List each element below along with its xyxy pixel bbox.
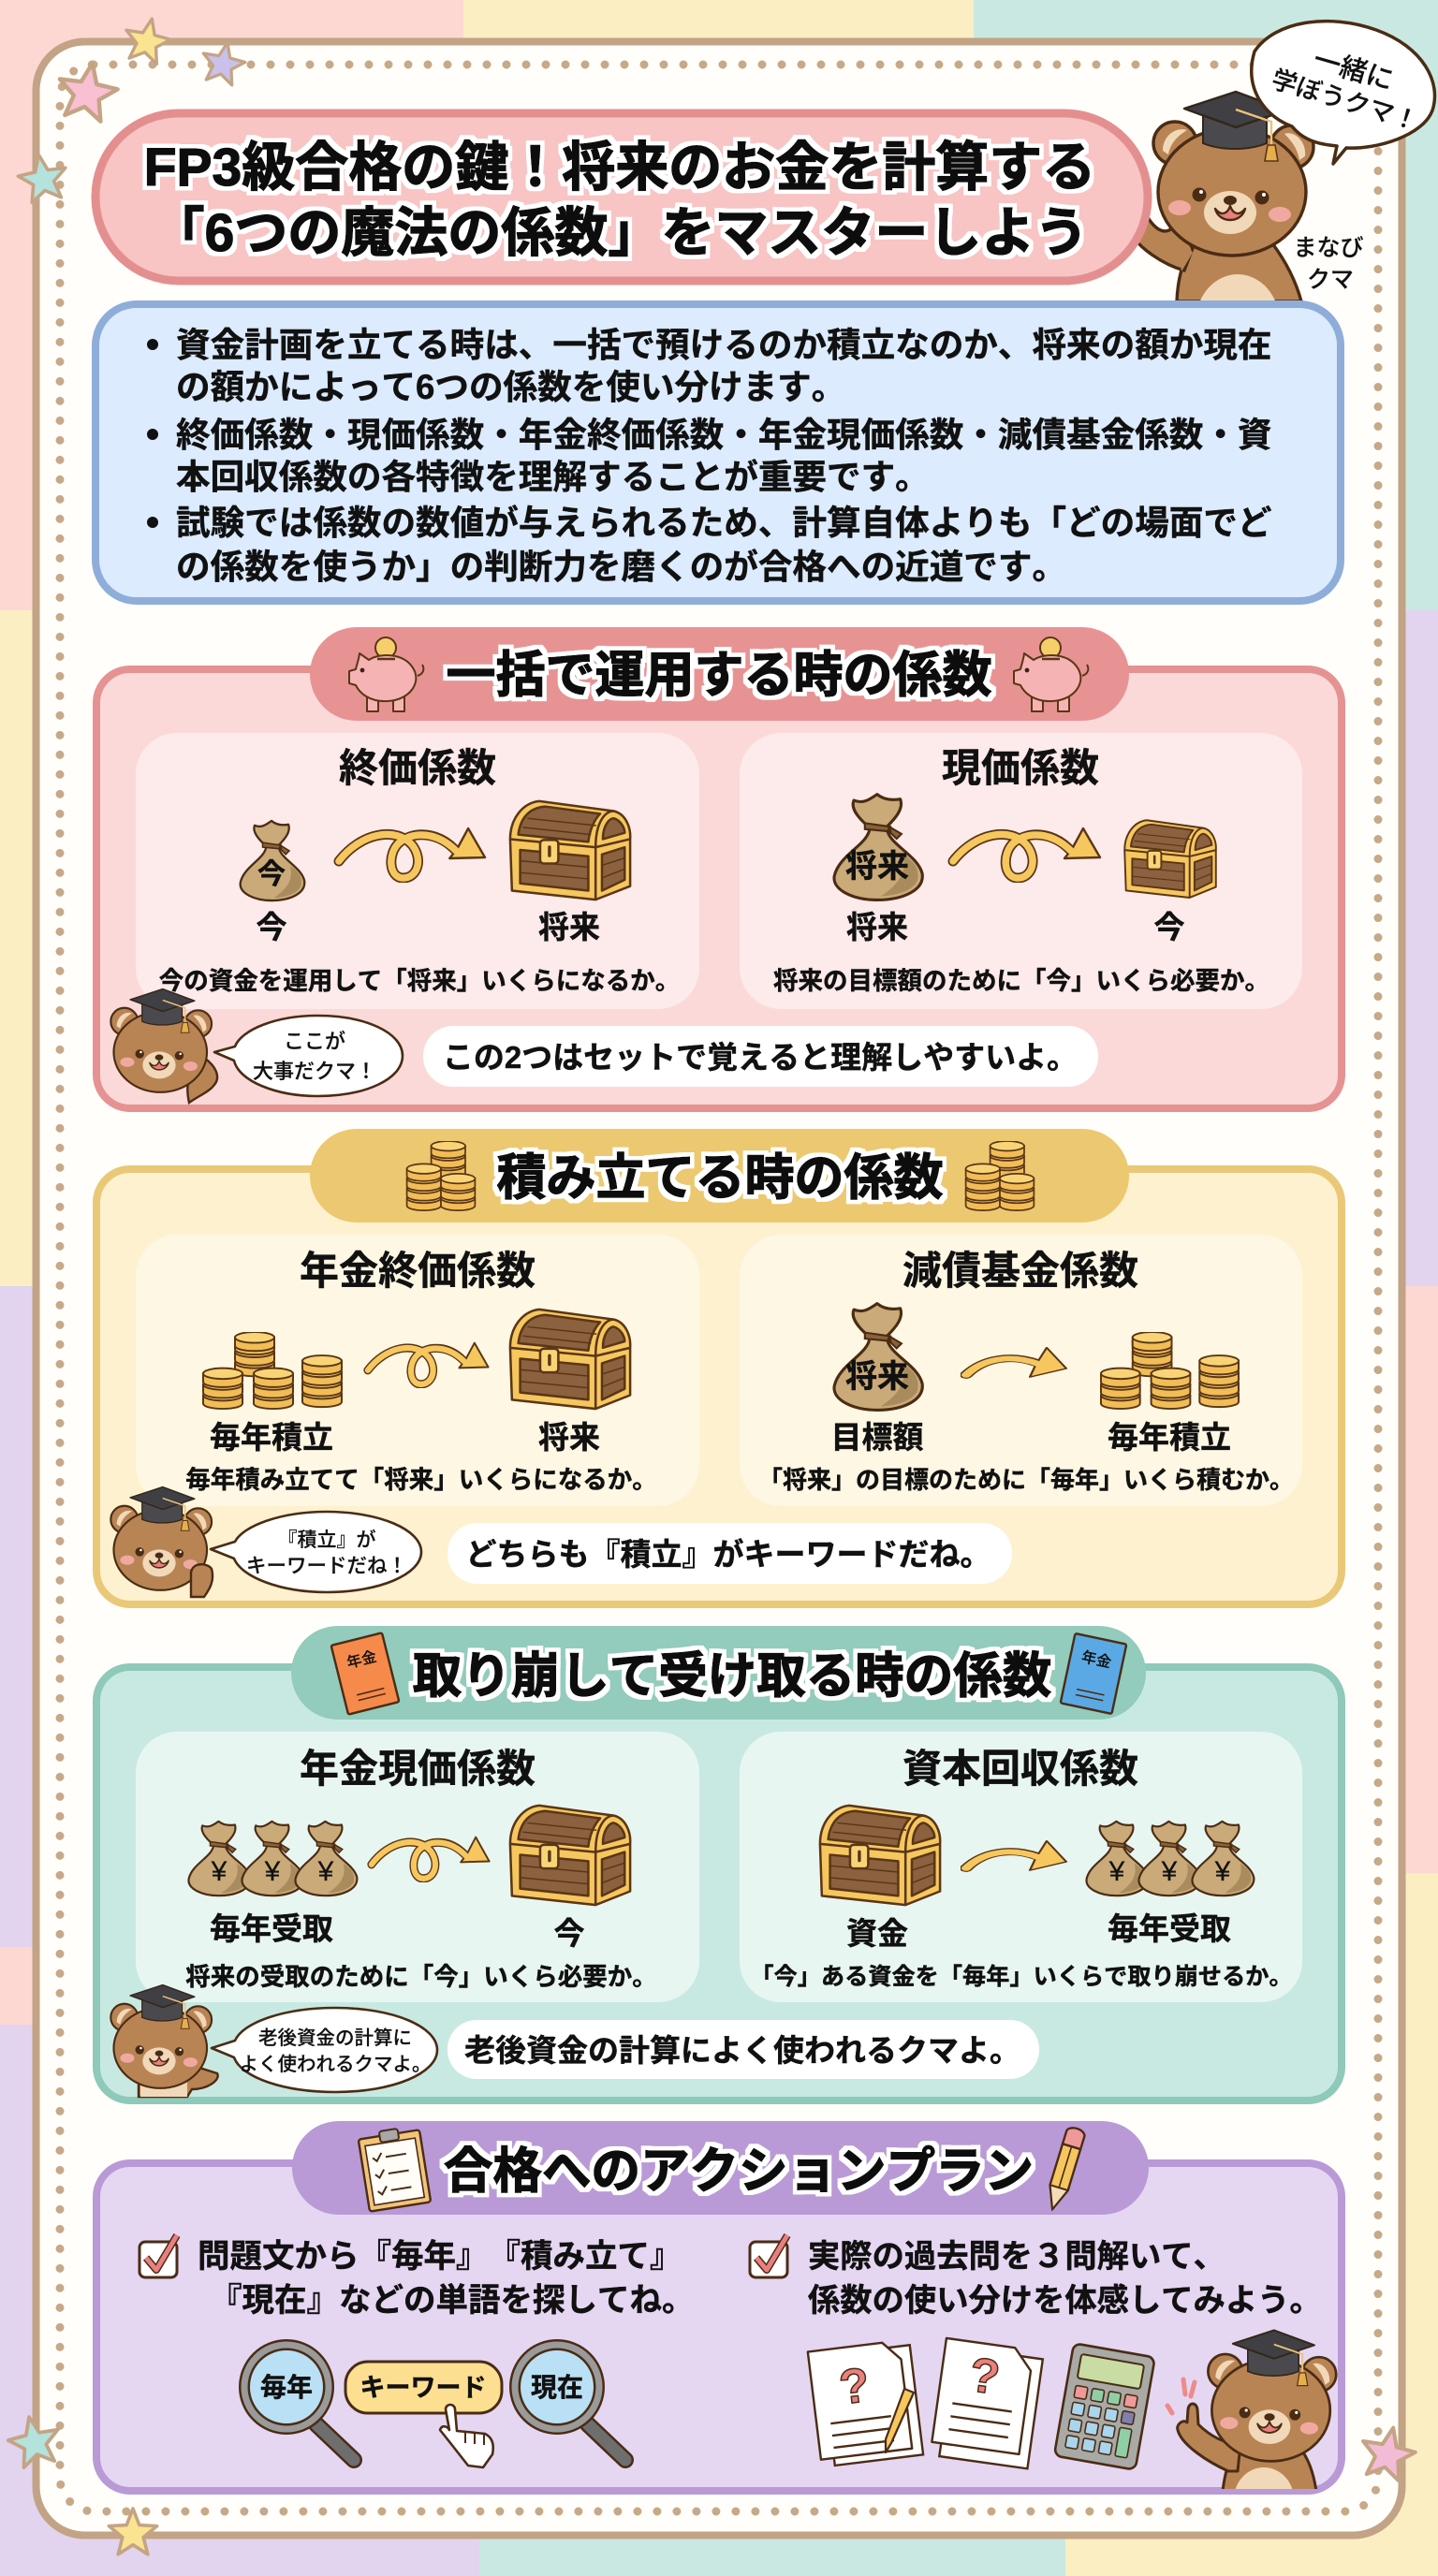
checklist item 2: 実際の過去問を３問解いて、	[808, 2239, 1225, 2275]
icon: money bag	[834, 1304, 922, 1410]
card: 年金現価係数: 毎年受取	[210, 1911, 333, 1946]
panel: summary bullets: 試験では係数の数値が与えられるため、計算自体よりも「どの場面でど	[176, 504, 1272, 542]
button: キーワード	[345, 2362, 502, 2413]
speech bubble	[214, 1016, 403, 1096]
speech bubble: 一緒に学ぼうクマ	[1252, 22, 1434, 164]
panel: 合格へのアクションプラン	[96, 2121, 1342, 2531]
note	[448, 1523, 1012, 1584]
icon: blue pension book	[1061, 1633, 1126, 1714]
heading	[310, 627, 1129, 721]
card: 現価係数: 将来の目標額のために「今」いくら必要か。	[773, 967, 1269, 995]
speech bubble: 老後資金の計算に	[258, 2027, 412, 2049]
icon: blue pension book: 年金	[1080, 1648, 1113, 1671]
heading: 取り崩して受け取る時の係数	[413, 1648, 1051, 1704]
panel: summary bullets: の係数を使うか」の判断力を磨くのが合格への近道です。	[176, 548, 1066, 586]
heading: 合格へのアクションプラン	[444, 2144, 1034, 2199]
card: 終価係数: 今の資金を運用して「将来」いくらになるか。	[159, 967, 680, 995]
speech bubble: よく使われるクマよ。	[240, 2054, 431, 2075]
card: 減債基金係数: 「将来」の目標のために「毎年」いくら積むか。	[758, 1466, 1294, 1494]
card: 終価係数: 今	[257, 910, 286, 944]
icon: orange pension book: 年金	[345, 1648, 378, 1672]
card: 現価係数: 今	[1153, 910, 1185, 944]
card: 減債基金係数: 毎年積立	[1108, 1420, 1231, 1455]
checklist item 1: 『現在』などの単語を探してね。	[210, 2283, 695, 2319]
icon: clipboard	[358, 2125, 431, 2212]
speech bubble: キーワードだね！	[246, 1555, 407, 1577]
icon: chest	[510, 801, 630, 900]
card: 資本回収係数: 資金	[846, 1916, 908, 1951]
bear	[110, 1487, 213, 1597]
heading	[291, 1626, 1146, 1720]
panel: summary bullets: 資金計画を立てる時は、一括で預けるのか積立なのか、将来の額か現在	[176, 326, 1272, 364]
card: 資本回収係数: 資本回収係数	[902, 1747, 1138, 1791]
card: 年金終価係数: 毎年積立	[210, 1420, 333, 1455]
note: 老後資金の計算によく使われるクマよ。	[464, 2033, 1020, 2068]
card: 資本回収係数: 「今」ある資金を「毎年」いくらで取り崩せるか。	[750, 1964, 1293, 1990]
panel: 積み立てる時の係数	[96, 1129, 1342, 1604]
speech bubble	[211, 1512, 421, 1592]
icon: magnifier 現在	[515, 2345, 625, 2460]
icon: chest	[510, 1806, 630, 1905]
bear pointing	[1165, 2329, 1338, 2489]
note	[448, 2020, 1039, 2079]
icon: magnifier 毎年	[244, 2345, 354, 2460]
icon: money bag: 将来	[845, 849, 909, 885]
card: 年金現価係数: 年金現価係数	[300, 1747, 536, 1791]
card: 資本回収係数	[740, 1732, 1302, 2002]
note: どちらも『積立』がキーワードだね。	[466, 1537, 990, 1572]
icon: chest	[510, 1310, 630, 1409]
card: 終価係数: 将来	[538, 910, 600, 944]
mascot name: まなび	[1293, 235, 1364, 261]
card: 減債基金係数	[740, 1235, 1302, 1506]
card: 年金終価係数: 年金終価係数	[300, 1249, 536, 1293]
heading: 一括で運用する時の係数	[446, 648, 992, 703]
card: 年金現価係数: 今	[554, 1916, 584, 1951]
bear	[110, 1985, 218, 2097]
speech bubble	[212, 2008, 437, 2092]
checklist item 1: 問題文から『毎年』『積み立て』	[198, 2239, 682, 2275]
panel: summary bullets: 終価係数・現価係数・年金終価係数・年金現価係数・減債基金係数・資	[176, 416, 1272, 454]
mascot bear waving	[1129, 92, 1313, 372]
icon: money bag: 将来	[845, 1359, 909, 1395]
checklist item 2	[750, 2235, 1322, 2319]
card: 減債基金係数: 減債基金係数	[902, 1249, 1138, 1293]
panel: 取り崩して受け取る時の係数	[96, 1626, 1342, 2100]
icon: coins	[1101, 1332, 1239, 1409]
title banner: FP3級合格の鍵！将来のお金を計算する	[144, 138, 1095, 198]
heading: 積み立てる時の係数	[496, 1150, 944, 1206]
icon: magnifier 毎年: 毎年	[260, 2373, 313, 2402]
icon: question papers with pencil: ?	[836, 2358, 873, 2415]
icon: money bag: 今	[257, 859, 286, 890]
card: 終価係数: 終価係数	[339, 746, 496, 790]
icon: money bag	[241, 821, 304, 900]
panel: summary bullets: の額かによって6つの係数を使い分けます。	[176, 368, 845, 406]
icon: pointer hand	[440, 2405, 493, 2467]
card: 減債基金係数: 目標額	[831, 1420, 923, 1455]
card: 年金現価係数: 将来の受取のために「今」いくら必要か。	[185, 1963, 657, 1991]
icon: question paper	[930, 2338, 1044, 2468]
card: 年金終価係数: 将来	[538, 1420, 600, 1455]
icon: orange pension book	[331, 1632, 399, 1715]
card: 現価係数: 将来	[846, 910, 908, 944]
icon: question paper: ?	[966, 2348, 1003, 2406]
checklist item 1	[139, 2235, 695, 2319]
icon: money bags	[189, 1822, 357, 1895]
icon: calculator	[1054, 2343, 1155, 2470]
arrow	[953, 828, 1100, 878]
panel: 一括で運用する時の係数	[96, 627, 1342, 1108]
icon: money bags: ¥	[264, 1856, 281, 1887]
panel: summary bullets: 本回収係数の各特徴を理解することが重要です。	[176, 458, 930, 496]
card: 現価係数: 現価係数	[942, 746, 1099, 790]
arrow	[966, 1841, 1066, 1870]
card: 終価係数	[136, 733, 699, 1009]
icon: chest	[820, 1806, 940, 1905]
icon: question papers with pencil	[808, 2339, 923, 2467]
card: 現価係数	[740, 733, 1302, 1009]
icon: money bags: ¥	[1108, 1856, 1125, 1887]
icon: money bag	[834, 795, 922, 900]
arrow	[966, 1348, 1066, 1377]
button: キーワード: キーワード	[360, 2374, 487, 2402]
title banner	[95, 113, 1148, 281]
mascot name	[1293, 235, 1364, 293]
icon: magnifier 現在: 現在	[531, 2373, 583, 2402]
card: 年金終価係数	[136, 1235, 699, 1506]
icon: money bags: ¥	[1214, 1856, 1231, 1887]
heading	[310, 1129, 1129, 1222]
icon: money bags	[1087, 1822, 1254, 1895]
bear	[110, 989, 217, 1103]
speech bubble: ここが	[284, 1030, 345, 1053]
speech bubble: 一緒に学ぼうクマ: 学ぼうクマ！	[1269, 65, 1421, 136]
note	[423, 1026, 1098, 1087]
arrow	[339, 828, 485, 878]
mascot name: クマ	[1307, 267, 1354, 293]
icon: money bags: ¥	[211, 1856, 227, 1887]
card: 年金現価係数	[136, 1732, 699, 2002]
icon: money bags: ¥	[1161, 1856, 1178, 1887]
icon: chest	[1124, 820, 1216, 898]
icon: pencil	[1044, 2126, 1086, 2212]
note: この2つはセットで覚えると理解しやすいよ。	[443, 1040, 1078, 1075]
heading	[292, 2121, 1149, 2215]
panel: summary bullets	[95, 304, 1341, 601]
speech bubble: 一緒に学ぼうクマ: 一緒に	[1310, 44, 1397, 96]
arrow	[368, 1343, 489, 1384]
title banner: 「6つの魔法の係数」をマスターしよう	[152, 203, 1088, 263]
checklist item 2: 係数の使い分けを体感してみよう。	[808, 2283, 1322, 2319]
card: 資本回収係数: 毎年受取	[1108, 1911, 1231, 1946]
speech bubble: 大事だクマ！	[253, 1060, 376, 1083]
icon: coins	[203, 1332, 342, 1409]
speech bubble: 『積立』が	[277, 1530, 376, 1551]
icon: money bags: ¥	[317, 1856, 334, 1887]
card: 年金終価係数: 毎年積み立てて「将来」いくらになるか。	[185, 1466, 657, 1494]
arrow	[372, 1837, 490, 1879]
